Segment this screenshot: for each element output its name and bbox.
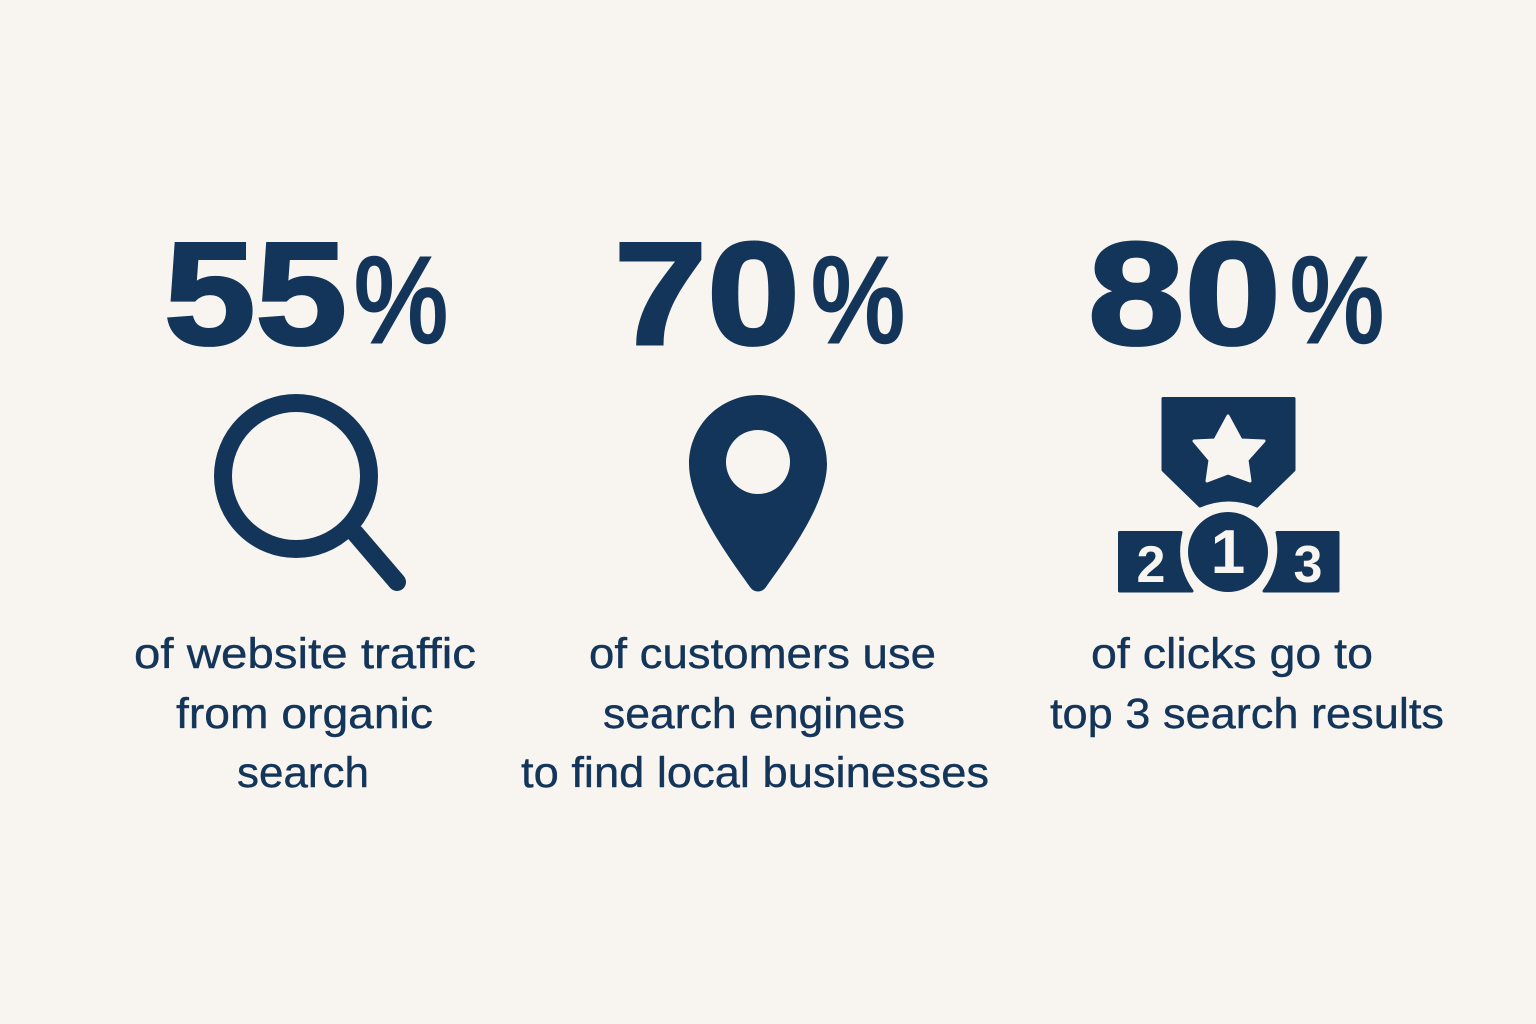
- caption: local businesses: [521, 630, 989, 797]
- stat: 80%: [1088, 212, 1384, 375]
- caption: local businesses: to find local businesses: [521, 749, 989, 797]
- caption: website traffic: search: [237, 749, 369, 797]
- stat: 70%: %: [811, 232, 905, 368]
- caption: top search results: [1050, 630, 1444, 738]
- caption: local businesses: of customers use: [589, 630, 936, 678]
- caption: website traffic: from organic: [176, 690, 433, 738]
- podium second place: 2: [1137, 536, 1165, 594]
- caption: website traffic: of website traffic: [134, 630, 476, 678]
- stat: 80%: 80: [1088, 212, 1281, 375]
- icon: location pin: [689, 395, 827, 592]
- stat: 70%: 70: [614, 212, 800, 375]
- icon: magnifying glass: [223, 403, 397, 582]
- medal first place: 1: [1211, 518, 1245, 587]
- panel: local search statistic: [521, 212, 989, 797]
- podium second place: [1120, 532, 1192, 594]
- caption: website traffic: [134, 630, 476, 797]
- podium third place: 3: [1294, 536, 1322, 594]
- medal first place: [1188, 512, 1268, 592]
- stat: 55%: 55: [164, 212, 347, 375]
- stat: 70%: [614, 212, 905, 375]
- caption: top search results: of clicks go to: [1091, 630, 1373, 678]
- stat: 80%: %: [1290, 232, 1384, 368]
- caption: local businesses: search engines: [603, 690, 905, 738]
- stat: 55%: [164, 212, 448, 375]
- icon: medal and podium: [1120, 398, 1338, 594]
- panel: organic search statistic: [134, 212, 476, 797]
- stat: 55%: %: [354, 232, 448, 368]
- panel: top results statistic: [1050, 212, 1444, 738]
- shield with star: [1163, 398, 1294, 506]
- caption: top search results: top 3 search results: [1050, 690, 1444, 738]
- podium third place: [1264, 532, 1338, 594]
